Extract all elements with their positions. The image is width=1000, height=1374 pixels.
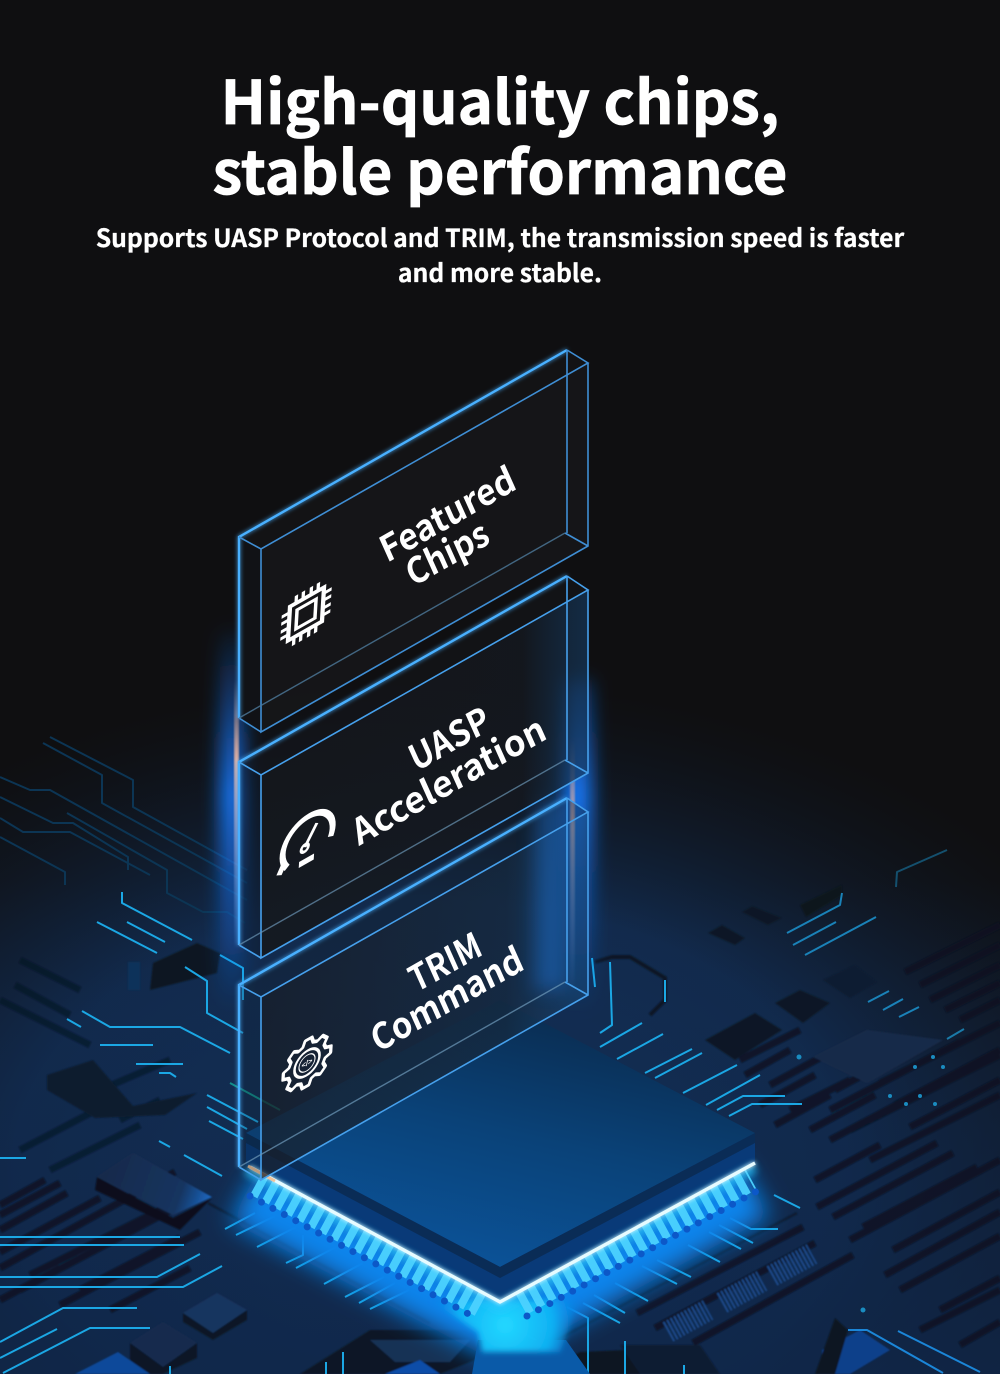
- subtitle: [96, 219, 904, 290]
- dark stepped block below chip: [300, 1330, 480, 1374]
- chip top surface: [246, 1000, 755, 1267]
- stripe chip B: [130, 1322, 197, 1367]
- lit plate: [97, 1153, 212, 1215]
- icon: processor: [280, 575, 332, 653]
- plate 2: UASP Acceleration: [239, 576, 588, 958]
- pins right: [521, 1179, 751, 1304]
- subtitle: Supports UASP Protocol and TRIM, the transmission speed is faster: [96, 219, 904, 255]
- dark block upper right: [800, 885, 842, 917]
- subtitle: and more stable.: [398, 254, 602, 290]
- central processor chip: [245, 1000, 757, 1374]
- dark block near capacitor: [150, 943, 220, 990]
- dark line beside right pins: [556, 1213, 797, 1340]
- chip side band: [246, 1133, 755, 1302]
- pin ends left: [250, 1196, 476, 1318]
- label: TRIM Command: Command: [361, 931, 530, 1062]
- dark upper side band: [246, 1133, 755, 1278]
- blue floor under front corner: [472, 1340, 590, 1374]
- memory stripes: [668, 1254, 812, 1332]
- board components and dark bars: [0, 885, 1000, 1374]
- lit plate shadow: [95, 1177, 212, 1230]
- dark hex outline: [595, 957, 665, 1015]
- stripe chip A dark: [183, 1310, 247, 1340]
- dark block mid left: [47, 1060, 197, 1118]
- title: High-quality chips,: [221, 55, 779, 142]
- icon: speedometer: [279, 802, 334, 876]
- small chip right A: [775, 990, 830, 1023]
- bright light edge wide glow: [246, 1168, 755, 1307]
- circuit traces: [0, 850, 980, 1374]
- capacitor: [128, 962, 140, 990]
- faint upper-left traces: [0, 737, 247, 923]
- wide glow beneath chip: [245, 1190, 755, 1330]
- plate 3: TRIM Command: [239, 798, 588, 1180]
- icon: gear with code: [282, 1026, 332, 1100]
- icon: gear with code: </>: [301, 1056, 313, 1071]
- pin ends right: [527, 1191, 757, 1316]
- label: Featured Chips: Featured: [370, 451, 522, 572]
- trace dots: [796, 1054, 945, 1312]
- glow pool at front corner: [430, 1300, 580, 1352]
- warm end of light edge: [248, 1166, 275, 1181]
- comb connector: [705, 1013, 782, 1060]
- label: UASP Acceleration: UASP: [399, 691, 497, 781]
- component bottom right: [822, 1330, 890, 1374]
- plate 1: Featured Chips: [239, 350, 588, 732]
- small chip right B: [823, 965, 877, 998]
- small parts: [708, 906, 782, 945]
- plateau on the right: [813, 1030, 943, 1083]
- bright light edge: [250, 1163, 755, 1302]
- title: stable performance: [212, 125, 788, 212]
- blue part bottom left: [75, 1352, 150, 1374]
- pins left: [256, 1184, 482, 1306]
- label: UASP Acceleration: Acceleration: [342, 702, 553, 856]
- dark frame bottom right: [815, 1318, 848, 1374]
- vertical light hazes: [220, 630, 592, 1040]
- stripe chip B dark: [130, 1343, 197, 1374]
- dark line beside left pins: [208, 1203, 430, 1323]
- label: Featured Chips: Chips: [396, 505, 496, 596]
- title: [212, 55, 788, 212]
- stripe chip A: [183, 1293, 247, 1333]
- label: TRIM Command: TRIM: [399, 917, 489, 1003]
- inner blue glow right: [535, 800, 565, 990]
